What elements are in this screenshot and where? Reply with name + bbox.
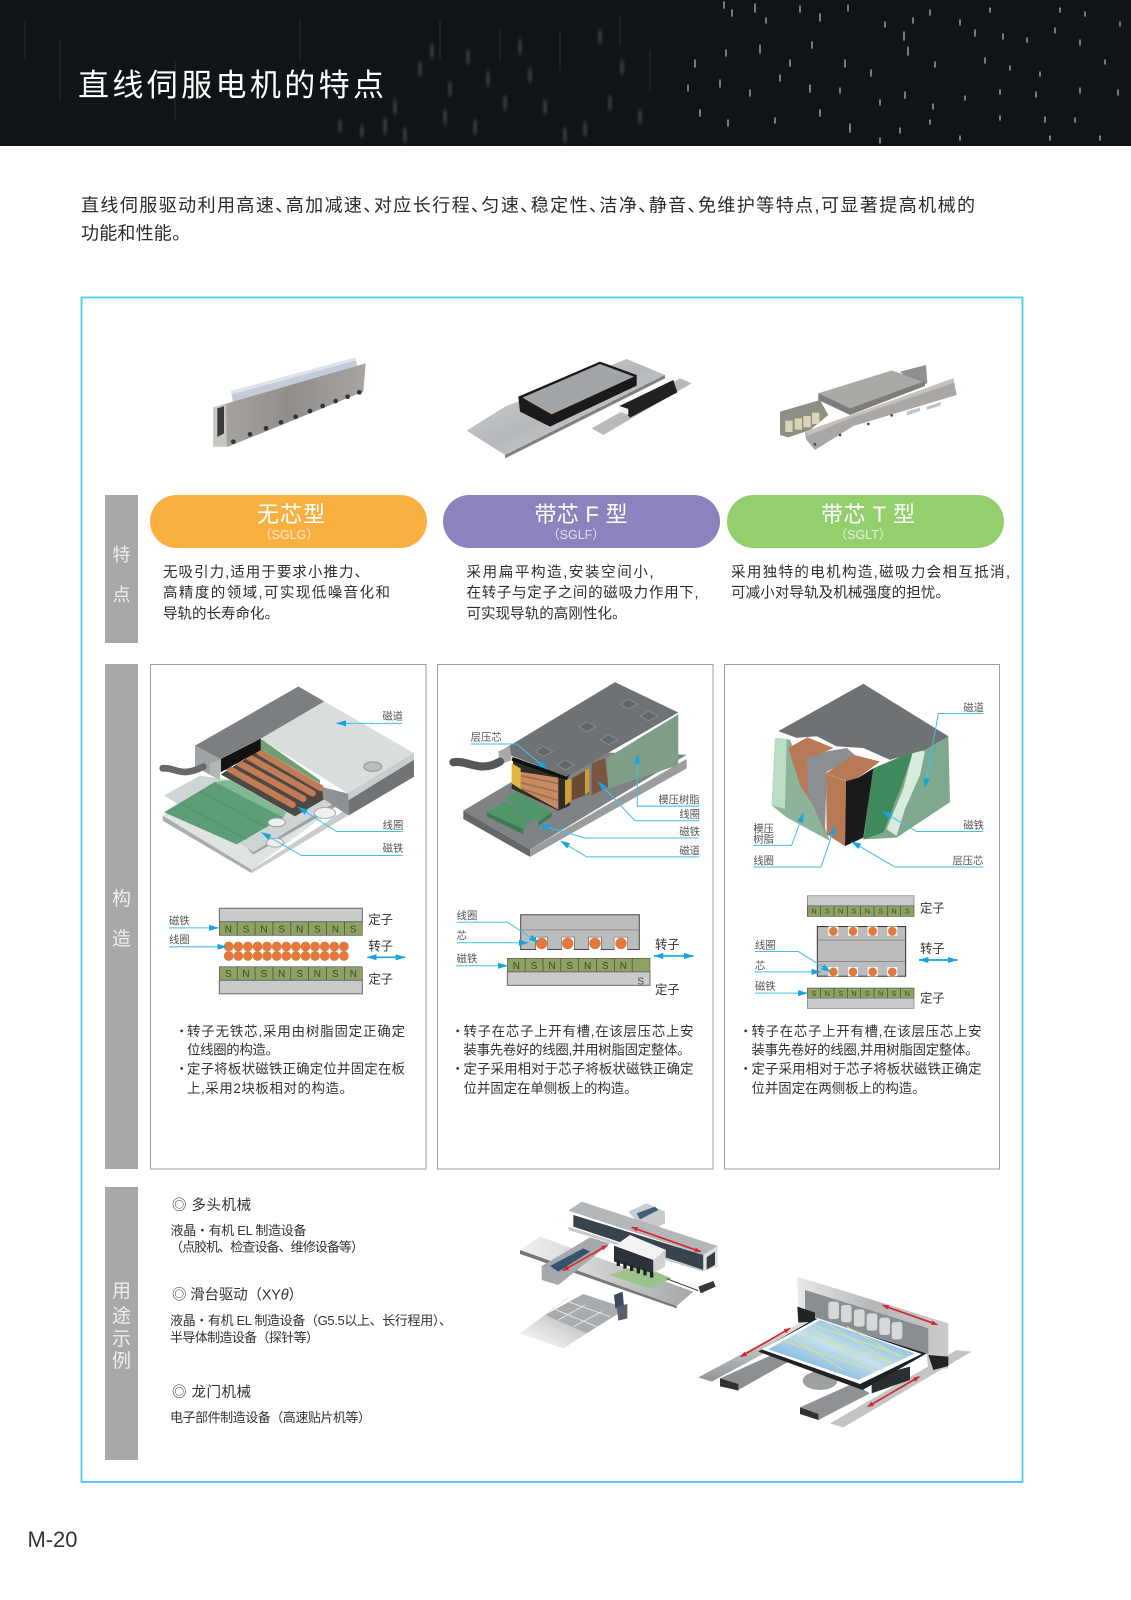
diagram: F-type cross-section: 芯 [457,929,467,942]
diagram: T-type cross-section: N [838,907,843,916]
sidebar: 用途示例 [105,1187,138,1460]
description text: 定子采用相对于芯子将板状磁铁正确定 [752,1062,982,1076]
description text: 位并固定在两侧板上的构造。 [752,1081,926,1096]
diagram: T-type cross-section: N [905,989,910,998]
diagram: F-type cross-section: 磁铁 [457,952,478,965]
diagram: coreless cross-section: N [225,924,232,935]
callout labels: 磁铁 [383,841,404,855]
diagram: T-type cross-section: 定子 [920,900,945,915]
diagram: F-type cross-section: S [602,961,609,972]
feature text: F type: 在转子与定子之间的磁吸力作用下, [466,584,698,602]
application: stage drive: ◎ 滑台驱动（XYθ） [172,1286,303,1304]
feature text: T type: 可减小对导轨及机械强度的担忧。 [731,584,950,602]
sidebar: 构造: 造 [112,928,131,950]
description text [739,1024,982,1096]
application: stage drive [170,1286,452,1345]
panel: coreless structure [150,664,426,1169]
pill: 无芯型: （SGLG） [259,528,319,542]
illustration: gantry mounter [520,1202,718,1348]
description text: 转子在芯子上开有槽,在该层压芯上安 [752,1024,982,1039]
callout labels: 层压芯 [471,731,502,744]
diagram: coreless cross-section: N [314,969,321,980]
diagram: F-type cross-section: N [513,961,520,972]
callout labels: 磁铁 [963,818,985,832]
diagram: coreless cross-section: S [261,969,268,980]
callout labels: 树脂 [753,832,774,845]
diagram: coreless cross-section: 线圈 [169,933,190,946]
feature text: T type: 采用独特的电机构造,磁吸力会相互抵消, [731,564,1010,581]
diagram: T-type cross-section: S [892,989,897,998]
diagram: T-type cross-section [755,896,957,1008]
description text: 装事先卷好的线圈,并用树脂固定整体。 [752,1042,978,1058]
diagram: T-type cross-section: 定子 [920,991,945,1006]
diagram: T-type cross-section: 磁铁 [755,979,776,992]
callout labels: 线圈 [383,818,403,832]
product photo: SGLT [780,365,957,450]
pill: 无芯型 [150,495,427,548]
diagram: F-type cross-section: S [531,961,538,972]
diagram: F-type cross-section: N [584,961,591,972]
feature text: F type: 可实现导轨的高刚性化。 [466,606,626,622]
diagram: T-type cross-section: N [891,907,897,916]
product photo: SGLG [213,358,366,447]
callout labels: 磁道 [382,710,403,723]
diagram: coreless cross-section [169,908,405,994]
diagram: T-type cross-section: N [878,989,883,998]
description text: 位线圈的构造。 [187,1042,279,1058]
diagram: F-type cross-section: S [637,977,644,988]
description text [175,1024,405,1096]
diagram: T-type cross-section: S [838,989,843,998]
diagram: T-type cross-section: N [865,907,870,916]
application: gantry machine [170,1384,371,1425]
pill: 无芯型: 无芯型 [257,502,325,527]
panel: F-type structure [438,664,713,1169]
diagram: F-type cross-section: 定子 [655,982,680,997]
diagram: T-type cross-section: S [878,907,883,916]
pill: 带芯T型 [727,495,1004,548]
description text: 位并固定在单侧板上的构造。 [464,1081,638,1096]
callout labels: 磁道 [679,844,700,857]
callout labels: 模压树脂 [658,793,700,806]
diagram: T-type cross-section: N [811,907,817,916]
panel: T-type structure [724,664,1000,1169]
diagram: coreless cross-section: S [243,924,250,935]
sidebar: 用途示例: 途 [112,1305,131,1327]
intro text: 直线伺服驱动利用高速、高加减速、对应长行程、匀速、稳定性、洁净、静音、免维护等特点,可显著提高机械的 [81,196,975,216]
sidebar: 特点: 点 [112,585,130,605]
diagram: coreless cross-section: 定子 [368,971,393,986]
description text: ・ [739,1062,752,1076]
callout labels: 线圈 [753,854,774,867]
diagram: coreless cross-section: 定子 [368,912,393,927]
feature text: T type [731,564,1010,602]
callout labels: 磁铁 [679,825,701,838]
description text: 定子将板状磁铁正确定位并固定在板 [187,1062,405,1076]
diagram: F-type cross-section [456,909,693,997]
application: stage drive: 液晶・有机 EL 制造设备（G5.5以上、长行程用）、 [170,1313,452,1328]
header band [0,0,1131,146]
pill: 带芯F型: （SGLF） [547,528,605,542]
sidebar: 构造 [105,664,138,1169]
description text: ・ [739,1024,752,1039]
diagram: coreless cross-section: 磁铁 [169,914,190,927]
application: multi-head machine: 液晶・有机 EL 制造设备 [170,1223,306,1238]
pill: 带芯F型: 带芯 F 型 [534,502,628,527]
illustration: T-type motor [753,684,985,1008]
description text: 装事先卷好的线圈,并用树脂固定整体。 [464,1042,690,1058]
diagram: T-type cross-section: 芯 [755,959,765,972]
intro text [81,196,975,244]
description text: 定子采用相对于芯子将板状磁铁正确定 [464,1062,694,1076]
illustration: F-type motor [453,682,701,997]
callout labels: 线圈 [679,807,700,820]
application: stage drive: 半导体制造设备（探针等） [170,1330,319,1345]
diagram: T-type cross-section: S [905,907,910,916]
pill: 带芯F型 [443,495,720,548]
illustration: XY stage [698,1277,972,1427]
diagram: T-type cross-section: N [851,989,857,998]
feature text: coreless: 无吸引力,适用于要求小推力、 [163,564,369,581]
application: gantry machine: 电子部件制造设备（高速贴片机等） [170,1410,371,1425]
intro text: 功能和性能。 [81,224,181,244]
description text: 上,采用2块板相对的构造。 [187,1081,353,1096]
description text [451,1024,694,1096]
description text: 转子在芯子上开有槽,在该层压芯上安 [464,1024,694,1039]
callout labels: 模压 [753,823,774,835]
application: multi-head machine: （点胶机、检查设备、维修设备等） [170,1240,364,1254]
diagram: F-type cross-section: N [548,961,556,972]
diagram: coreless cross-section: S [350,924,357,935]
diagram: T-type cross-section: S [825,907,830,916]
diagram: F-type cross-section: 线圈 [457,909,477,922]
diagram: coreless cross-section: N [260,924,268,935]
blue frame panel [82,298,1022,1482]
diagram: coreless cross-section: N [296,924,303,935]
illustration: coreless motor [163,687,414,994]
description text: ・ [451,1024,464,1039]
description text: ・ [175,1024,188,1039]
diagram: T-type cross-section: 转子 [920,941,945,956]
diagram: F-type cross-section: N [620,961,627,972]
sidebar: 用途示例: 示 [112,1329,131,1350]
diagram: coreless cross-section: S [225,969,232,980]
callout labels [471,731,701,857]
diagram: coreless cross-section: 转子 [368,938,393,954]
diagram: T-type cross-section: S [852,907,857,916]
product photo: SGLF [467,359,692,458]
diagram: T-type cross-section: S [865,989,870,998]
application: multi-head machine [170,1197,364,1254]
pill: 带芯T型: （SGLT） [835,528,891,542]
sidebar: 特点: 特 [112,545,130,565]
feature text: coreless [163,564,390,622]
diagram: coreless cross-section: N [242,969,250,980]
callout labels [262,710,404,856]
callout labels: 层压芯 [952,854,983,867]
callout labels [753,701,985,867]
diagram: coreless cross-section: N [278,969,285,980]
sidebar: 用途示例: 例 [112,1350,131,1372]
feature text: coreless: 导轨的长寿命化。 [163,604,279,622]
diagram: coreless cross-section: N [332,924,339,935]
description text: ・ [175,1062,188,1076]
description text: ・ [451,1062,464,1076]
callout labels: 磁道 [963,701,984,714]
sidebar: 构造: 构 [112,888,131,910]
title: 直线伺服电机的特点 [78,68,384,103]
diagram: coreless cross-section: S [278,924,285,935]
feature text: coreless: 高精度的领域,可实现低噪音化和 [163,584,390,602]
page number: M-20 [28,1527,78,1552]
pill: 带芯T型: 带芯 T 型 [821,502,915,527]
description text: 转子无铁芯,采用由树脂固定正确定 [187,1024,405,1039]
feature text: F type [466,564,698,622]
feature text: F type: 采用扁平构造,安装空间小, [466,564,654,581]
diagram: coreless cross-section: N [350,969,357,980]
diagram: coreless cross-section: S [332,969,339,980]
diagram: coreless cross-section: S [296,969,303,980]
application: multi-head machine: ◎ 多头机械 [172,1197,251,1214]
application: gantry machine: ◎ 龙门机械 [172,1384,251,1401]
sidebar: 用途示例: 用 [112,1281,131,1302]
diagram: F-type cross-section: S [566,961,573,972]
diagram: F-type cross-section: 转子 [655,937,680,952]
diagram: T-type cross-section: N [825,989,830,998]
diagram: T-type cross-section: S [812,989,817,998]
diagram: T-type cross-section: 线圈 [755,938,776,952]
diagram: coreless cross-section: S [314,924,321,935]
sidebar: 特点 [105,495,138,643]
